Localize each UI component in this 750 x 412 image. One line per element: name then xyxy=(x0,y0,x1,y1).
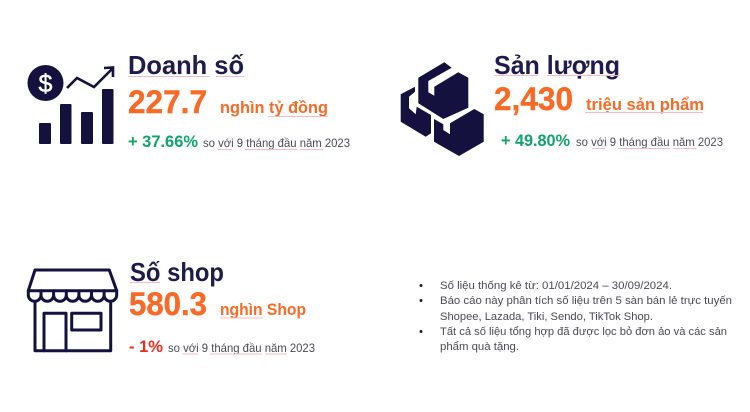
icon: storefront xyxy=(28,270,117,351)
value: 580.3: 580.3 xyxy=(129,286,207,322)
note: date range: Số liệu thống kê từ: 01/01/2024 – 30/09/2024. xyxy=(440,280,672,292)
heading: Doanh số: Doanh số xyxy=(128,50,244,80)
value: 227.7: 227.7 xyxy=(128,84,207,120)
comparison note: so với 9 tháng đầu năm 2023 xyxy=(203,136,350,150)
panel: Doanh số xyxy=(28,50,350,151)
icon: stacked boxes xyxy=(401,62,484,156)
bullets xyxy=(420,284,422,333)
note: filtering, line 1: Tất cả số liệu tổng hợp đã được lọc bỏ đơn ảo và các sản xyxy=(440,326,727,338)
change: +49.80%: + 49.80% xyxy=(501,132,570,150)
change: +37.66%: + 37.66% xyxy=(128,133,198,151)
text block: report notes xyxy=(420,280,732,353)
note: platforms, line 2: Shopee, Lazada, Tiki, Sendo, TikTok Shop. xyxy=(440,311,653,323)
unit: nghìn Shop: nghìn Shop xyxy=(220,300,306,319)
panel: Số shop xyxy=(28,257,315,356)
icon: revenue chart with dollar coin xyxy=(28,65,114,144)
note: platforms, line 1: Báo cáo này phân tích số liệu trên 5 sàn bán lẻ trực tuyến xyxy=(440,295,732,307)
heading: Số shop: Số shop xyxy=(130,257,224,287)
change: -1%: - 1% xyxy=(129,337,163,356)
unit: nghìn tỷ đồng: nghìn tỷ đồng xyxy=(220,98,328,117)
icon: revenue chart with dollar coin: $ xyxy=(39,70,53,98)
comparison note: so với 9 tháng đầu năm 2023 xyxy=(576,135,723,149)
panel: Sản lượng xyxy=(401,50,723,156)
unit: triệu sản phẩm: triệu sản phẩm xyxy=(586,95,704,114)
note: filtering, line 2: phẩm quà tặng. xyxy=(440,341,519,353)
heading: Sản lượng: Sản lượng xyxy=(494,50,620,80)
comparison note: so với 9 tháng đầu năm 2023 xyxy=(168,341,315,355)
value: 2,430: 2,430 xyxy=(494,81,573,117)
